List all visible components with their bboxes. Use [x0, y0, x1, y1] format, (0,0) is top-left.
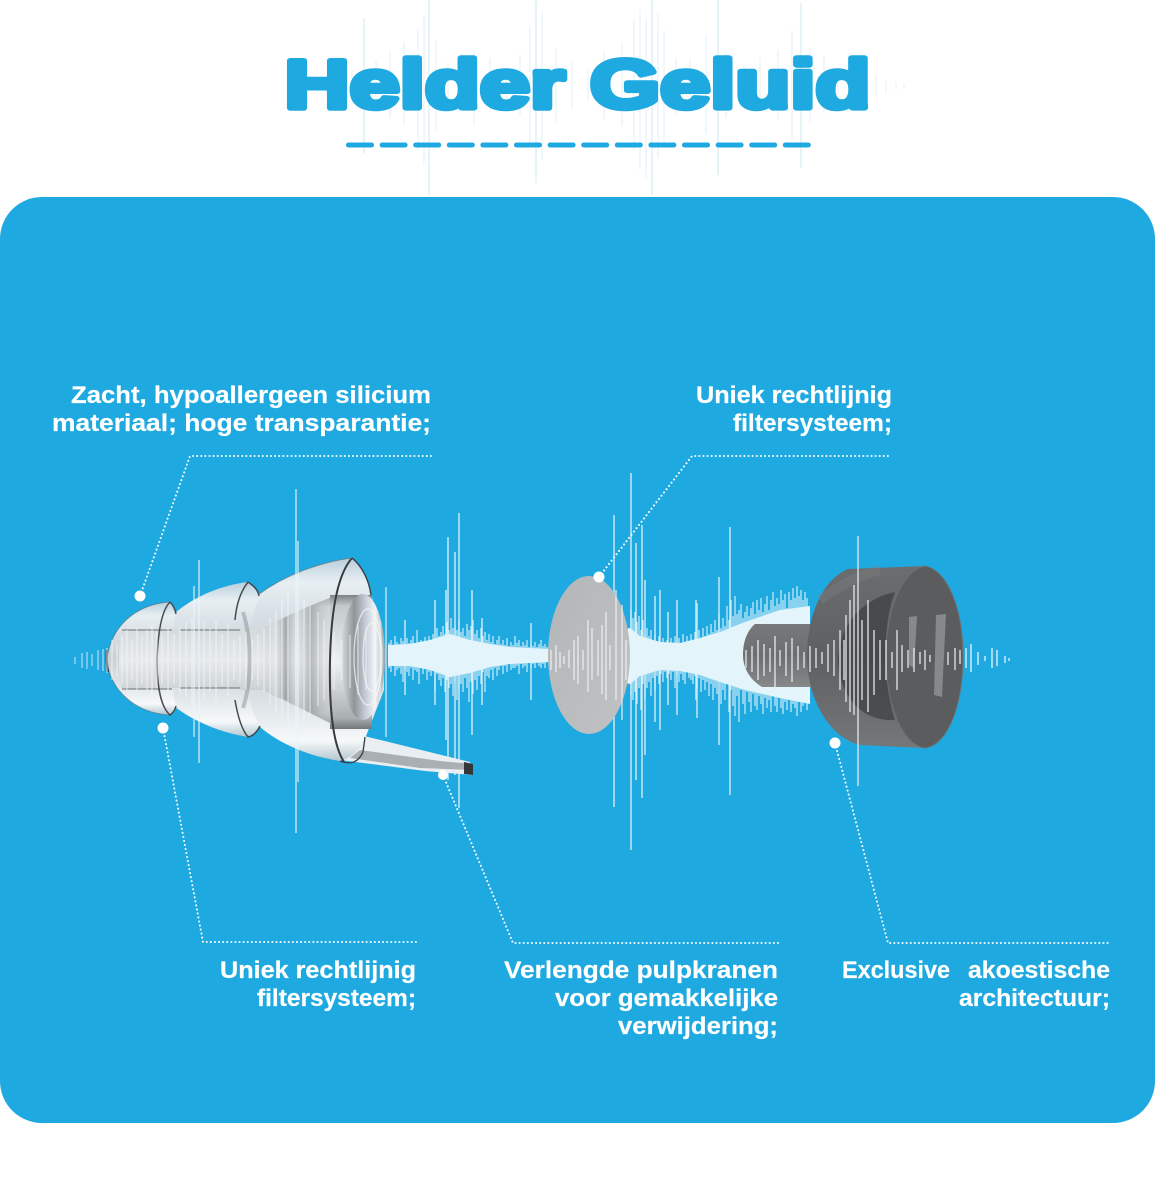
- callout: pull tabs: Verlengde pulpkranen: [504, 957, 778, 984]
- earplug middle flange: [170, 582, 260, 737]
- waveform over objects: [75, 590, 380, 725]
- earplug inner tube: [119, 597, 332, 724]
- callout: acoustic architecture: architectuur;: [959, 985, 1110, 1012]
- callout: filter bottom: [158, 722, 416, 1012]
- earplug filter face: [341, 594, 385, 720]
- plug top highlight: [820, 570, 880, 600]
- callout: pull tabs: voor gemakkelijke: [555, 985, 778, 1012]
- earplug filter housing: [330, 595, 372, 729]
- callout: soft silicone: materiaal; hoge transparantie;: [52, 410, 431, 437]
- callout: filter bottom: filtersysteem;: [257, 985, 416, 1012]
- callout: filter bottom: Uniek rechtlijnig: [220, 957, 416, 984]
- waveform behind parts: [388, 473, 810, 850]
- callout: filter top: [594, 382, 892, 582]
- earplug inner core: [122, 612, 250, 708]
- callout: acoustic architecture: akoestische: [968, 957, 1110, 984]
- plug cylinder: [807, 566, 963, 748]
- waveform fine bars: [389, 586, 807, 722]
- earplug tip: [107, 602, 176, 715]
- waveform left tail and tall lines: [194, 489, 386, 833]
- callout: pull tabs: [438, 770, 778, 1040]
- waveform tall lines: [405, 473, 730, 850]
- earplug filter rings: [354, 609, 382, 705]
- title dashed underline: [346, 142, 811, 148]
- callout: soft silicone: [52, 382, 431, 602]
- callout: acoustic architecture: [830, 738, 1110, 1012]
- callout: pull tabs: verwijdering;: [618, 1013, 778, 1040]
- panel: blue background: [0, 197, 1155, 1123]
- earplug large flange: [244, 558, 384, 761]
- plug stem: [743, 624, 812, 687]
- callout: acoustic architecture: Exclusive: [842, 957, 950, 984]
- plug inner dark shape: [838, 592, 895, 720]
- title: Helder Geluid: [284, 46, 870, 123]
- earplug: [107, 558, 473, 775]
- waveform core: [388, 606, 810, 704]
- callout: filter top: filtersysteem;: [733, 410, 892, 437]
- acoustic plug: [743, 566, 963, 748]
- earplug flange rims: [107, 558, 371, 763]
- waveform right tail: [966, 644, 1009, 672]
- plug end face: [886, 566, 963, 748]
- title background waveform: [296, 0, 904, 195]
- plug face slots: [909, 614, 946, 697]
- earplug pull stem: [340, 735, 473, 775]
- filter disk: [548, 576, 630, 734]
- callout: filter top: Uniek rechtlijnig: [696, 382, 892, 409]
- callout: soft silicone: Zacht, hypoallergeen silicium: [71, 382, 431, 409]
- foreground waveform: [75, 489, 1009, 833]
- earplug glass bands: [262, 597, 332, 724]
